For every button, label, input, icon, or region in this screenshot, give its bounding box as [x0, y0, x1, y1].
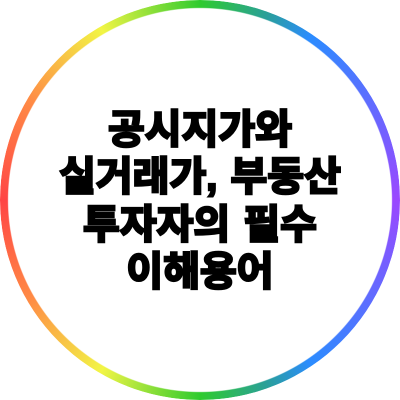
title: 실거래가, 부동산: [59, 155, 341, 199]
title: 이해용어: [126, 250, 274, 294]
title: 공시지가와: [108, 108, 292, 152]
title: [58, 108, 341, 294]
title: 투자자의 필수: [83, 202, 317, 246]
